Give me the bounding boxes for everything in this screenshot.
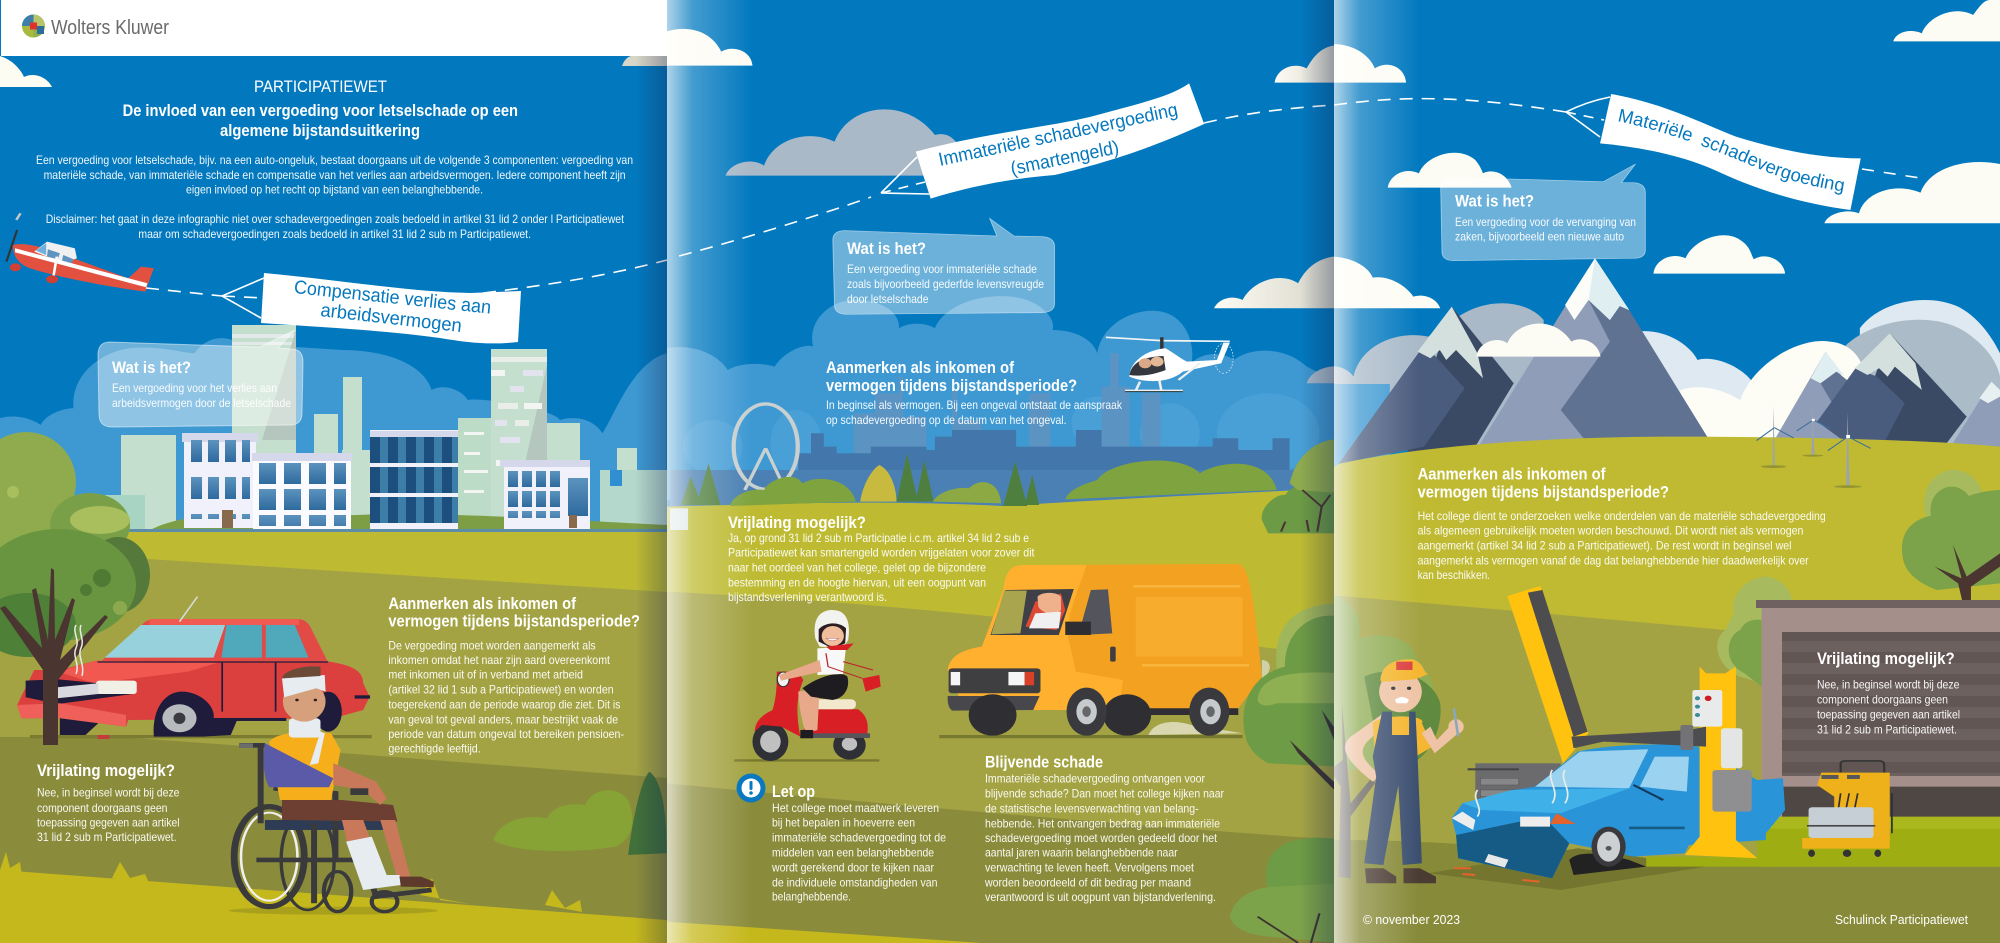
ground — [0, 529, 667, 943]
text: aanmerken als inkomen (panel 3) — [1418, 464, 1826, 582]
icon: exclamation — [736, 774, 766, 802]
text: blijvende schade: hebbende. Het ontvangen bedrag aan immateriële — [985, 816, 1220, 830]
text: vrijlating mogelijk (panel 3): Nee, in beginsel wordt bij deze — [1817, 677, 1960, 691]
text: let op: wordt gerekend door te kijken naar — [771, 860, 934, 874]
title block: De invloed van een vergoeding voor letselschade op een — [123, 101, 518, 120]
text: blijvende schade: verantwoord is uit oogpunt van bijstandverlening. — [985, 890, 1216, 904]
man in wheelchair — [229, 666, 438, 915]
footer: date: © november 2023 — [1363, 913, 1460, 927]
text: let op: bij het bepalen in hoeverre een — [772, 816, 915, 830]
banner: immateriele schadevergoeding (smartengeld): (smartengeld) — [1009, 137, 1121, 180]
text: vrijlating mogelijk (panel 1): Vrijlating mogelijk? — [37, 761, 175, 780]
text: vrijlating mogelijk (panel 2): Participatiewet kan smartengeld worden vrijgelaten voor zover dit — [728, 546, 1035, 560]
gray cloud behind banner — [726, 109, 969, 176]
ground — [666, 488, 1341, 943]
text: vrijlating mogelijk (panel 2): bestemming en de hoogte hiervan, uit een oogpunt van — [728, 576, 986, 590]
text: aanmerken als inkomen (panel 1): periode van datum ongeval tot bereiken pensioen- — [388, 727, 624, 741]
panel: compensatie verlies aan arbeidsvermogen — [0, 0, 667, 943]
garage — [1646, 600, 2000, 867]
text: vrijlating mogelijk (panel 2): Ja, op grond 31 lid 2 sub m Participatie i.c.m. artikel 34 lid 2 sub e — [728, 531, 1029, 545]
white clouds — [666, 29, 1341, 308]
text: aanmerken als inkomen (panel 1): van geval tot geval anders, maar bestrijkt vaak de — [388, 712, 618, 726]
panel: materiele schadevergoeding — [1334, 0, 2000, 943]
text: aanmerken als inkomen (panel 1): inkomen omdat het naar zijn aard overeenkomt — [388, 653, 611, 667]
wind turbines — [1756, 400, 1871, 488]
title block: algemene bijstandsuitkering — [220, 121, 420, 140]
pale blue cloud bank — [666, 296, 1341, 500]
side trees right — [1230, 603, 1341, 943]
speech bubble: wat is het: zaken, bijvoorbeeld een nieuwe auto — [1455, 230, 1624, 244]
text: aanmerken als inkomen (panel 3): vermogen tijdens bijstandsperiode? — [1418, 483, 1669, 502]
text: aanmerken als inkomen (panel 2): vermogen tijdens bijstandsperiode? — [826, 376, 1077, 395]
text: aanmerken als inkomen (panel 3): aangemerkt (artikel 34 lid 2 sub a Participatiewet). De rest wordt in beginsel wel — [1418, 538, 1792, 552]
speech bubble: wat is het — [833, 218, 1055, 314]
banner: compensatie verlies aan arbeidsvermogen — [261, 273, 521, 343]
sky background left — [0, 0, 667, 470]
text: aanmerken als inkomen (panel 2): In beginsel als vermogen. Bij een ongeval ontstaat de aanspraak — [826, 398, 1123, 412]
office buildings — [182, 430, 590, 530]
text: let op — [771, 782, 946, 904]
back cloud layers — [1330, 300, 2000, 467]
banner: materiele schadevergoeding: Materiële schadevergoeding — [1618, 108, 1844, 195]
dashed tow line — [679, 105, 1334, 256]
intro text: materiële schade, van immateriële schade en compensatie van het verlies aan arbeidsvermogen. Iedere component heeft zijn — [44, 168, 626, 182]
banner: immateriele schadevergoeding (smartengeld) — [916, 83, 1204, 199]
text: aanmerken als inkomen (panel 3): Aanmerken als inkomen of — [1418, 464, 1606, 483]
crashed blue car — [1452, 744, 1785, 882]
text: aanmerken als inkomen (panel 2): op schadevergoeding op de datum van het ongeval. — [826, 413, 1066, 427]
tree trunk in front of car — [0, 568, 108, 745]
text: aanmerken als inkomen (panel 2) — [826, 358, 1123, 427]
intro text — [36, 153, 633, 197]
page fold shading — [638, 56, 667, 943]
text: aanmerken als inkomen (panel 1): met inkomen uit of in verband met arbeid — [388, 668, 583, 682]
diagnostic machine — [1802, 761, 1892, 857]
speech bubble: wat is het — [1441, 164, 1645, 261]
dashed tow line — [1334, 97, 1920, 178]
footer: source: Schulinck Participatiewet — [1835, 913, 1968, 927]
text: aanmerken als inkomen (panel 3): kan beschikken. — [1418, 568, 1490, 582]
disclaimer: maar om schadevergoedingen zoals bedoeld in artikel 31 lid 2 sub m Participatiewet. — [138, 227, 531, 241]
top corner clouds — [0, 56, 667, 87]
city skyline background towers — [105, 325, 667, 537]
text: vrijlating mogelijk (panel 3): 31 lid 2 sub m Participatiewet. — [1817, 722, 1957, 736]
text: aanmerken als inkomen (panel 3): Het college dient te onderzoeken welke onderdelen van de materiële schadevergoeding — [1418, 509, 1826, 523]
dashed tow line — [146, 260, 667, 318]
speech bubble: wat is het: arbeidsvermogen door de letselschade — [112, 396, 291, 410]
text: let op: Let op — [772, 782, 815, 801]
text: vrijlating mogelijk (panel 3): component doorgaans geen — [1817, 692, 1948, 706]
text: vrijlating mogelijk (panel 2): naar het oordeel van het college, gelet op de bijzondere — [728, 561, 986, 575]
text: vrijlating mogelijk (panel 3): Vrijlating mogelijk? — [1817, 649, 1955, 668]
text: blijvende schade: worden beoordeeld of dit bedrag per maand — [984, 876, 1191, 890]
small hills behind city — [152, 514, 667, 529]
text: vrijlating mogelijk (panel 1): toepassing gegeven aan artikel — [37, 816, 180, 830]
banner: compensatie verlies aan arbeidsvermogen: arbeidsvermogen — [319, 300, 463, 337]
text: let op: Het college moet maatwerk leveren — [772, 801, 939, 815]
text: aanmerken als inkomen (panel 1): vermogen tijdens bijstandsperiode? — [388, 612, 640, 631]
text: let op: belanghebbende. — [772, 890, 851, 904]
text: blijvende schade — [984, 753, 1224, 904]
text: let op: de individuele omstandigheden van — [772, 875, 938, 889]
page fold shading — [667, 0, 1334, 943]
treeline — [681, 439, 1341, 533]
speech bubble: wat is het: Wat is het? — [112, 359, 191, 377]
text: aanmerken als inkomen (panel 1): Aanmerken als inkomen of — [388, 594, 576, 613]
red car — [17, 597, 372, 739]
text: vrijlating mogelijk (panel 2) — [728, 513, 1035, 604]
title block — [123, 78, 518, 140]
woman on red scooter — [734, 610, 881, 762]
header: white bar — [1, 0, 667, 56]
intro text: eigen invloed op het recht op bijstand van een belanghebbende. — [186, 183, 483, 197]
text: aanmerken als inkomen (panel 1) — [388, 594, 640, 756]
text: vrijlating mogelijk (panel 1): Nee, in beginsel wordt bij deze — [37, 786, 180, 800]
text: blijvende schade: Immateriële schadevergoeding ontvangen voor — [985, 772, 1205, 786]
yellow lift column and motor — [1571, 667, 1757, 858]
disclaimer: Disclaimer: het gaat in deze infographic niet over schadevergoedingen zoals bedoeld in artikel 31 lid 2 onder l Participatiewet — [46, 212, 625, 226]
clouds — [1330, 0, 2000, 308]
speech bubble: wat is het: Een vergoeding voor immateriële schade — [847, 262, 1037, 276]
text: vrijlating mogelijk (panel 3) — [1817, 649, 1960, 736]
helicopter — [1106, 337, 1233, 392]
speech bubble: wat is het: zoals bijvoorbeeld gederfde levensvreugde — [847, 277, 1044, 291]
banner: compensatie verlies aan arbeidsvermogen: Compensatie verlies aan — [293, 277, 492, 319]
speech bubble: wat is het: Wat is het? — [847, 240, 926, 258]
text: blijvende schade: verwachting te leven heeft. Vervolgens moet — [985, 861, 1195, 875]
text: blijvende schade: aantal jaren waarin belanghebbende naar — [985, 846, 1178, 860]
speech bubble: wat is het: Wat is het? — [1455, 193, 1534, 211]
text: vrijlating mogelijk (panel 2): bijstandsverlening verantwoord is. — [728, 590, 887, 604]
text: aanmerken als inkomen (panel 1): toegerekend aan de periode waarop die ziet. Dit is — [388, 698, 620, 712]
logo: Wolters Kluwer: Wolters Kluwer — [51, 17, 169, 39]
text: vrijlating mogelijk (panel 1): component doorgaans geen — [37, 801, 168, 815]
text: vrijlating mogelijk (panel 3): toepassing gegeven aan artikel — [1817, 707, 1960, 721]
garage door — [1782, 632, 2000, 776]
mountains — [1339, 258, 2000, 464]
panel: immateriele schadevergoeding — [666, 0, 1341, 943]
ferris wheel — [734, 404, 798, 490]
background trees — [1330, 470, 2000, 878]
text: blijvende schade: Blijvende schade — [985, 753, 1103, 772]
page fold light — [1334, 0, 1419, 943]
banner: immateriele schadevergoeding (smartengeld): Immateriële schadevergoeding — [937, 100, 1180, 171]
text: aanmerken als inkomen (panel 1): (artikel 32 lid 1 sub a Participatiewet) en worden — [388, 683, 614, 697]
text: let op: immateriële schadevergoeding tot de — [772, 831, 946, 845]
disclaimer — [46, 212, 625, 241]
text: aanmerken als inkomen (panel 3): aangemerkt als vermogen vanaf de dag dat belanghebbende hier daadwerkelijk over — [1418, 553, 1809, 567]
text: vrijlating mogelijk (panel 2): Vrijlating mogelijk? — [728, 513, 866, 532]
city skyline — [670, 353, 1341, 510]
text: aanmerken als inkomen (panel 2): Aanmerken als inkomen of — [826, 358, 1014, 377]
text: aanmerken als inkomen (panel 1): gerechtigde leeftijd. — [388, 742, 481, 756]
text: aanmerken als inkomen (panel 3): als algemeen gebruikelijk moeten worden beschouwd. Dit wordt niet als vermogen — [1418, 524, 1803, 538]
banner: materiele schadevergoeding — [1600, 94, 1861, 210]
mechanic — [1345, 659, 1464, 883]
ground — [1330, 437, 2000, 943]
text: blijvende schade: blijvende schade? Dan moet het college kijken naar — [985, 787, 1224, 801]
speech bubble: wat is het: door letselschade — [847, 292, 929, 306]
text: aanmerken als inkomen (panel 1): De vergoeding moet worden aangemerkt als — [388, 638, 596, 652]
sky background middle — [667, 0, 1334, 560]
clouds behind city — [0, 338, 667, 533]
text: let op: middelen van een belanghebbende — [772, 846, 934, 860]
sky background right — [1334, 0, 2000, 500]
intro text: Een vergoeding voor letselschade, bijv. na een auto-ongeluk, bestaat doorgaans uit de volgende 3 componenten: vergoeding van — [36, 153, 633, 167]
lighter cloud lumps — [683, 393, 1319, 477]
title block: PARTICIPATIEWET — [254, 78, 387, 96]
text: blijvende schade: de statistische levensverwachting van belang- — [985, 802, 1199, 816]
car lift pillars — [1468, 586, 1589, 800]
tree left foliage — [0, 432, 150, 657]
text: vrijlating mogelijk (panel 1): 31 lid 2 sub m Participatiewet. — [37, 830, 176, 844]
text: blijvende schade: schadevergoeding moet worden gedeeld door het — [985, 831, 1218, 845]
bushes on the right — [494, 772, 667, 855]
red plane — [6, 213, 154, 292]
gray cloud right — [1306, 366, 1334, 384]
speech bubble: wat is het: Een vergoeding voor het verlies aan — [112, 381, 277, 395]
text: vrijlating mogelijk (panel 1) — [37, 761, 180, 844]
speech bubble: wat is het: Een vergoeding voor de vervanging van — [1455, 215, 1636, 229]
logo: Wolters Kluwer — [22, 14, 169, 39]
cargo van — [939, 564, 1270, 738]
speech bubble: wat is het — [98, 330, 303, 427]
